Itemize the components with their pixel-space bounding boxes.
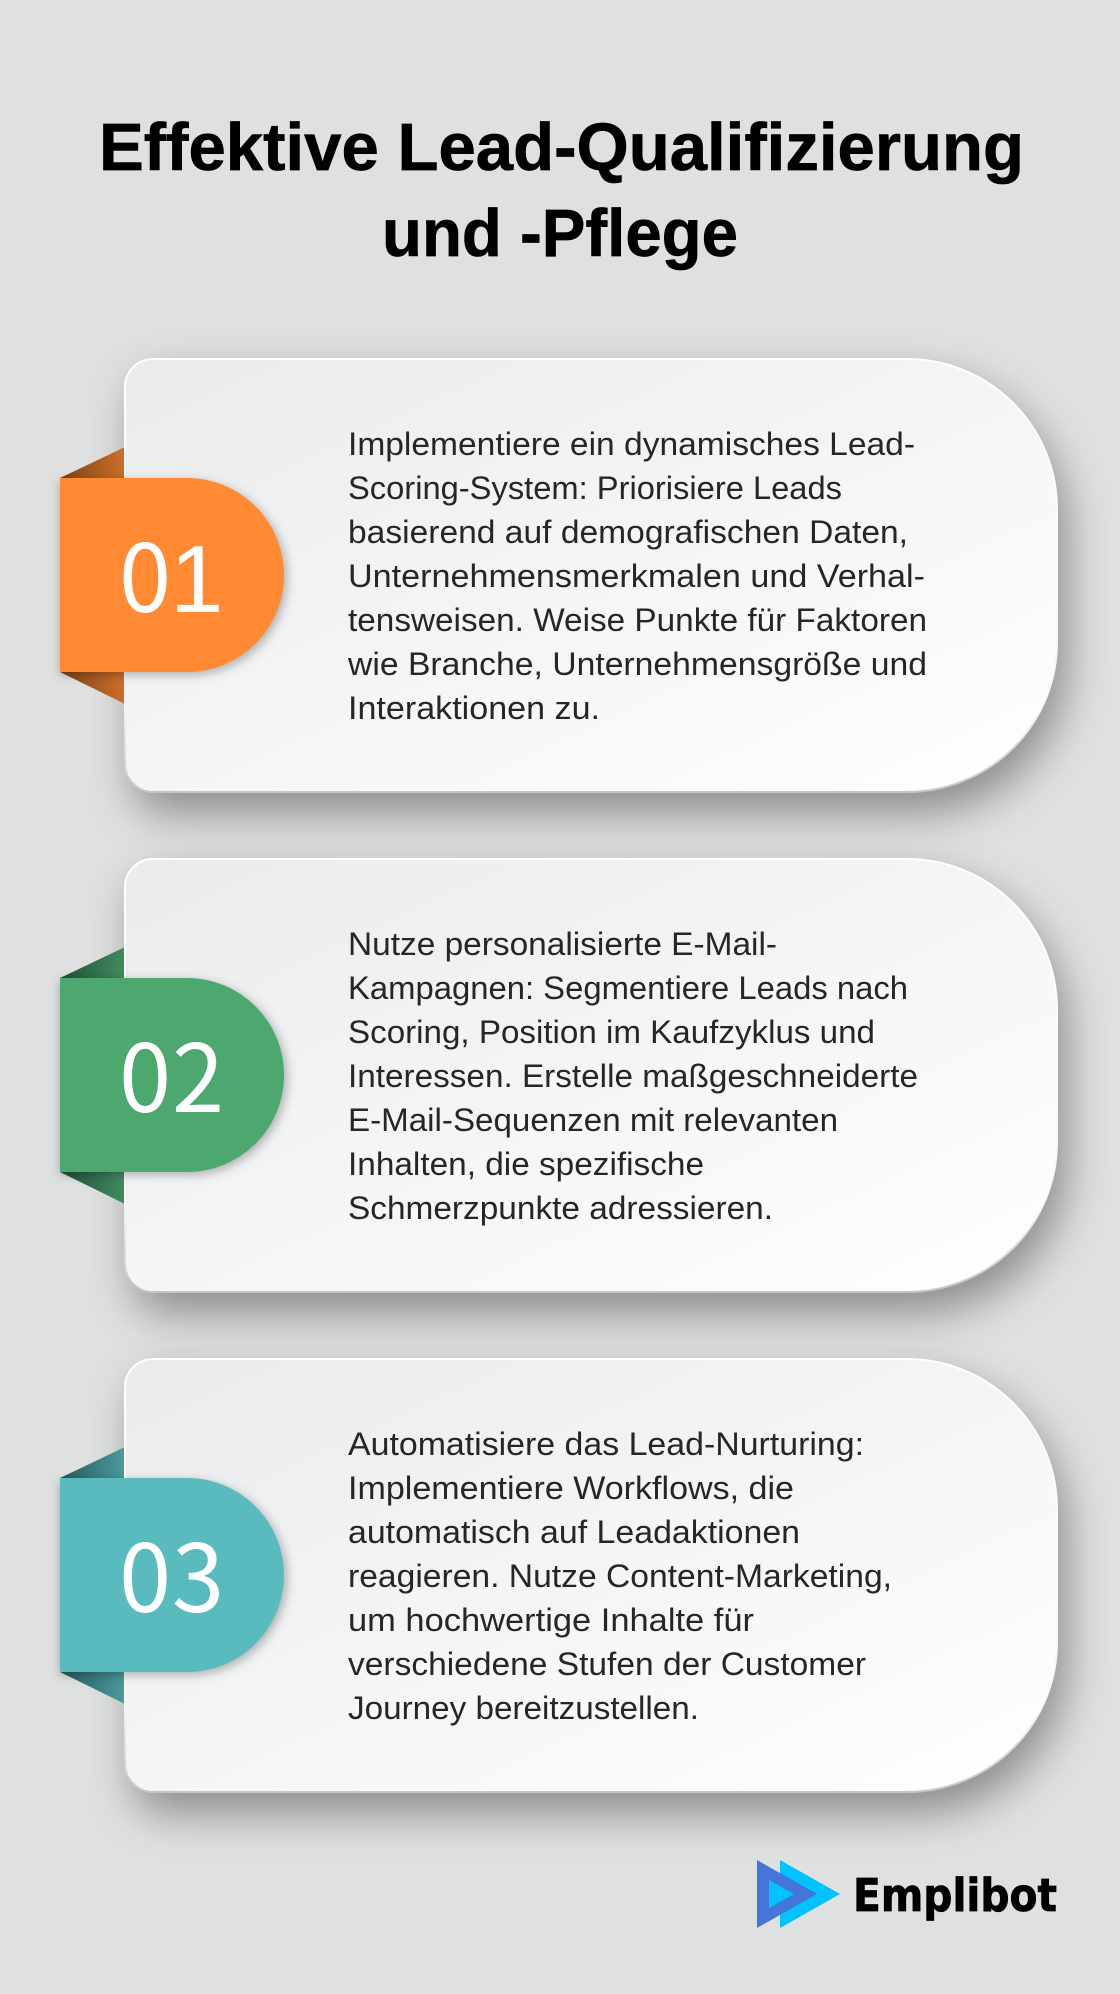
number 02: 02 [119,1004,224,1140]
text block 01: Interaktionen zu. [348,690,600,726]
text block 02: Scoring, Position im Kaufzyklus und [348,1014,875,1050]
text block 01: Scoring-System: Priorisiere Leads [348,470,842,506]
text block 02: E-Mail-Sequenzen mit relevanten [348,1102,838,1138]
badge shadow [60,481,287,675]
text block 03: verschiedene Stufen der Customer [348,1646,866,1682]
card [125,859,1057,1292]
card [125,359,1057,792]
text block 01: Implementiere ein dynamisches Lead- [348,426,915,462]
number 03: 03 [119,1504,224,1640]
text block 03: automatisch auf Leadaktionen [348,1514,800,1550]
text block 03: um hochwertige Inhalte für [348,1602,754,1638]
ribbon folds [60,447,125,704]
wordmark: Emplibot [853,1869,1057,1922]
title: und -Pflege [382,196,738,271]
panel: step 03 [60,1359,1066,1813]
text block 03: Journey bereitzustellen. [348,1690,699,1726]
card shadow [134,378,1066,813]
text block 02: Schmerzpunkte adressieren. [348,1190,773,1226]
text block 01 [347,426,927,726]
ribbon folds [60,1447,125,1704]
text block 02: Interessen. Erstelle maßgeschneiderte [348,1058,918,1094]
panel: step 01 [60,359,1066,813]
text block 03: reagieren. Nutze Content-Marketing, [348,1558,892,1594]
card shadow [134,878,1066,1313]
text block 03 [348,1426,892,1726]
text block 02: Kampagnen: Segmentiere Leads nach [348,970,908,1006]
text block 01: wie Branche, Unternehmensgröße und [347,646,927,682]
text block 02 [348,926,918,1226]
number 01: 1 [170,526,223,633]
badge [60,1478,284,1672]
icon: play triangles [757,1860,840,1928]
text block 02: Inhalten, die spezifische [348,1146,704,1182]
title: Effektive Lead-Qualifizierung [99,110,1024,185]
ribbon folds [60,947,125,1204]
title [99,110,1024,271]
text block 03: Implementiere Workflows, die [348,1470,794,1506]
badge shadow [60,981,287,1175]
text block 02: Nutze personalisierte E-Mail- [348,926,777,962]
badge [60,478,284,672]
logo: Emplibot [757,1860,1057,1928]
badge [60,978,284,1172]
text block 01: Unternehmensmerkmalen und Verhal- [348,558,925,594]
text block 01: basierend auf demografischen Daten, [348,514,908,550]
card [125,1359,1057,1792]
text block 01: tensweisen. Weise Punkte für Faktoren [348,602,927,638]
text block 03: Automatisiere das Lead-Nurturing: [348,1426,864,1462]
panel: step 02 [60,859,1066,1313]
card shadow [134,1378,1066,1813]
number 01: 0 [119,504,171,640]
badge shadow [60,1481,287,1675]
